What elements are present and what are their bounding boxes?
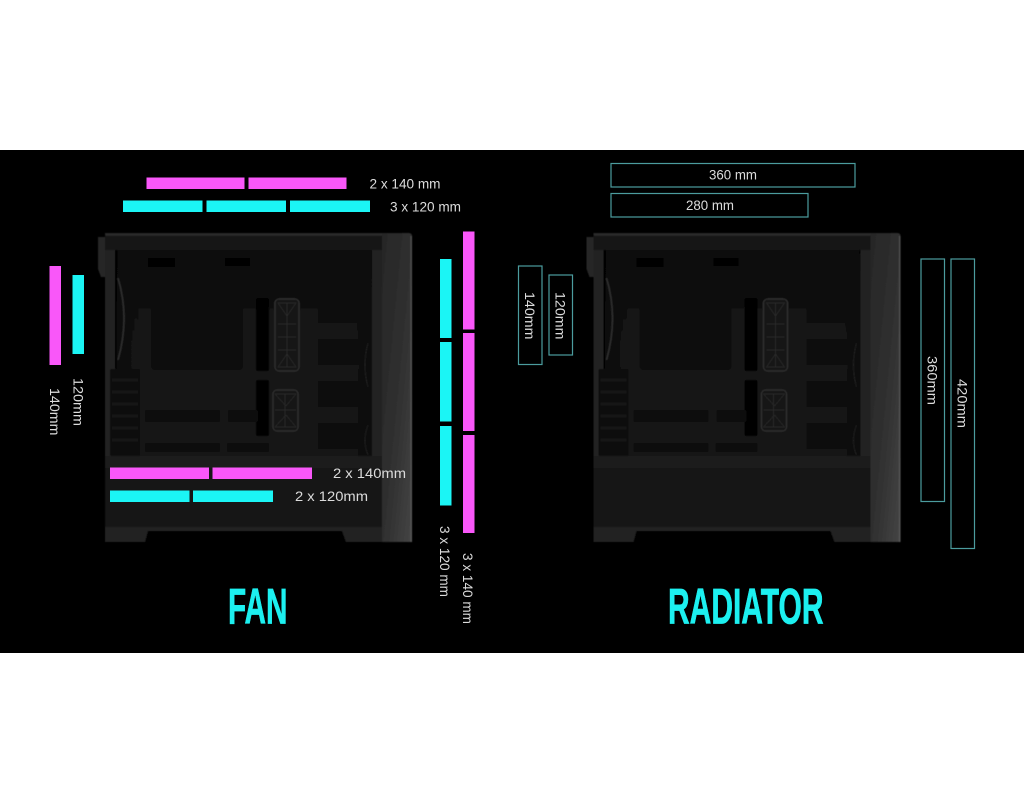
radiator box: 360mm vertical <box>921 259 944 502</box>
radiator box: 360 mm: 360 mm <box>709 168 757 182</box>
label: 120mm: 120mm <box>70 378 86 426</box>
label: 3 x 120 mm vertical: 3 x 120 mm <box>437 526 452 597</box>
radiator box: 280 mm: 280 mm <box>686 198 734 213</box>
heading: FAN: FAN <box>228 578 288 634</box>
label: 2 x 120mm: 2 x 120mm <box>295 489 368 504</box>
left cyan bar: 120mm <box>72 275 84 354</box>
left magenta bar: 140mm <box>50 266 61 365</box>
top cyan bars: 3 x 120 mm <box>123 200 370 212</box>
radiator box: 120mm: 120mm <box>552 292 568 340</box>
label: 3 x 120 mm: 3 x 120 mm <box>390 200 461 214</box>
label: 140mm: 140mm <box>47 388 62 436</box>
black panel <box>0 150 1024 653</box>
label: 2 x 140 mm: 2 x 140 mm <box>370 176 440 192</box>
heading: RADIATOR: RADIATOR <box>668 578 824 634</box>
label: 3 x 140 mm vertical: 3 x 140 mm <box>460 553 475 624</box>
pc case: radiator side <box>586 233 900 542</box>
pc case: fan side <box>98 233 412 542</box>
top magenta bars: 2 x 140 mm <box>146 178 346 189</box>
radiator box: 360mm vertical: 360mm <box>924 356 940 405</box>
radiator box: 360 mm <box>611 164 855 187</box>
label: 2 x 140mm: 2 x 140mm <box>333 466 406 481</box>
radiator box: 280 mm <box>611 194 808 217</box>
right magenta bars: 3 x 140 mm <box>463 232 474 533</box>
radiator box: 140mm <box>518 266 542 364</box>
radiator box: 420mm vertical <box>951 259 974 548</box>
bottom magenta bars: 2 x 140mm <box>110 468 312 479</box>
bottom cyan bars: 2 x 120mm <box>110 490 273 502</box>
radiator box: 420mm vertical: 420mm <box>954 379 970 428</box>
right cyan bars: 3 x 120 mm <box>440 259 452 506</box>
radiator box: 120mm <box>549 275 572 355</box>
radiator box: 140mm: 140mm <box>522 292 537 340</box>
